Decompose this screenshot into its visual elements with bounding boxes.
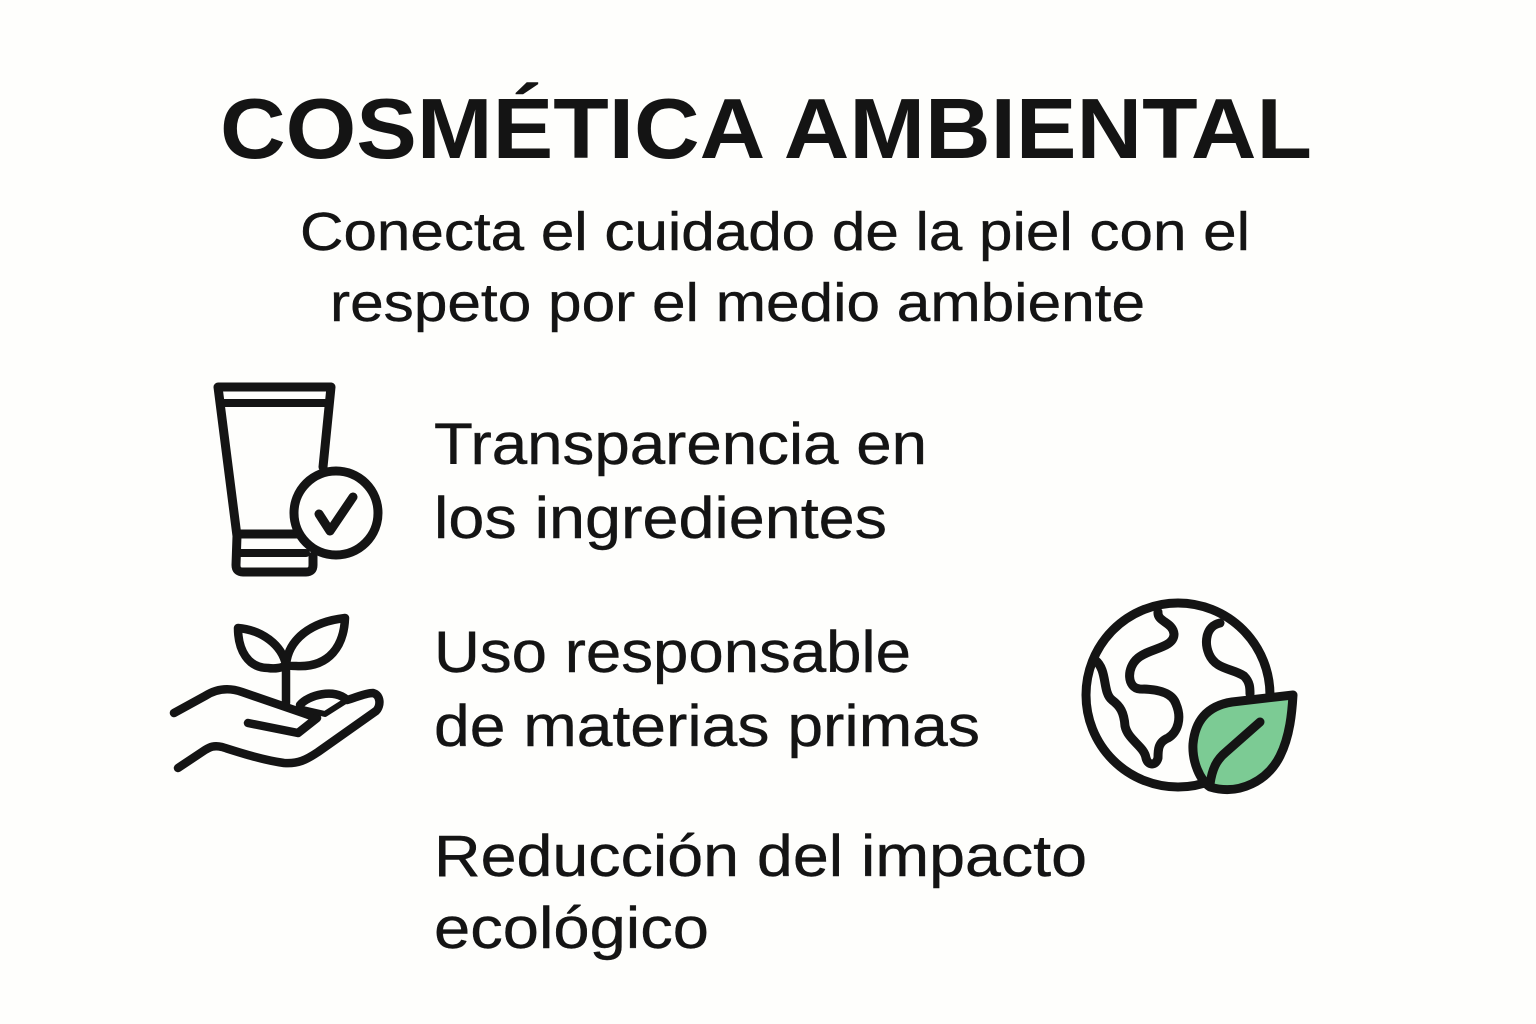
subtitle: Conecta el cuidado de la piel con el [300,202,1250,262]
icon: cosmetic tube with check mark [218,387,378,572]
text: responsible use of raw materials [434,620,980,759]
text: reduction of ecological impact: Reducción del impacto [434,824,1087,889]
title: COSMÉTICA AMBIENTAL [220,82,1312,177]
text: transparency of ingredients: Transparencia en [434,412,927,477]
text: transparency of ingredients [434,412,927,551]
text: responsible use of raw materials: Uso responsable [434,620,911,685]
text: responsible use of raw materials: de materias primas [434,694,980,759]
subtitle [300,202,1250,333]
text: reduction of ecological impact [434,824,1087,961]
text: reduction of ecological impact: ecológico [434,896,709,961]
icon: globe with green leaf [1086,603,1293,790]
subtitle: respeto por el medio ambiente [330,273,1145,333]
text: transparency of ingredients: los ingredientes [434,486,887,551]
icon: hand holding sprout [174,618,379,768]
